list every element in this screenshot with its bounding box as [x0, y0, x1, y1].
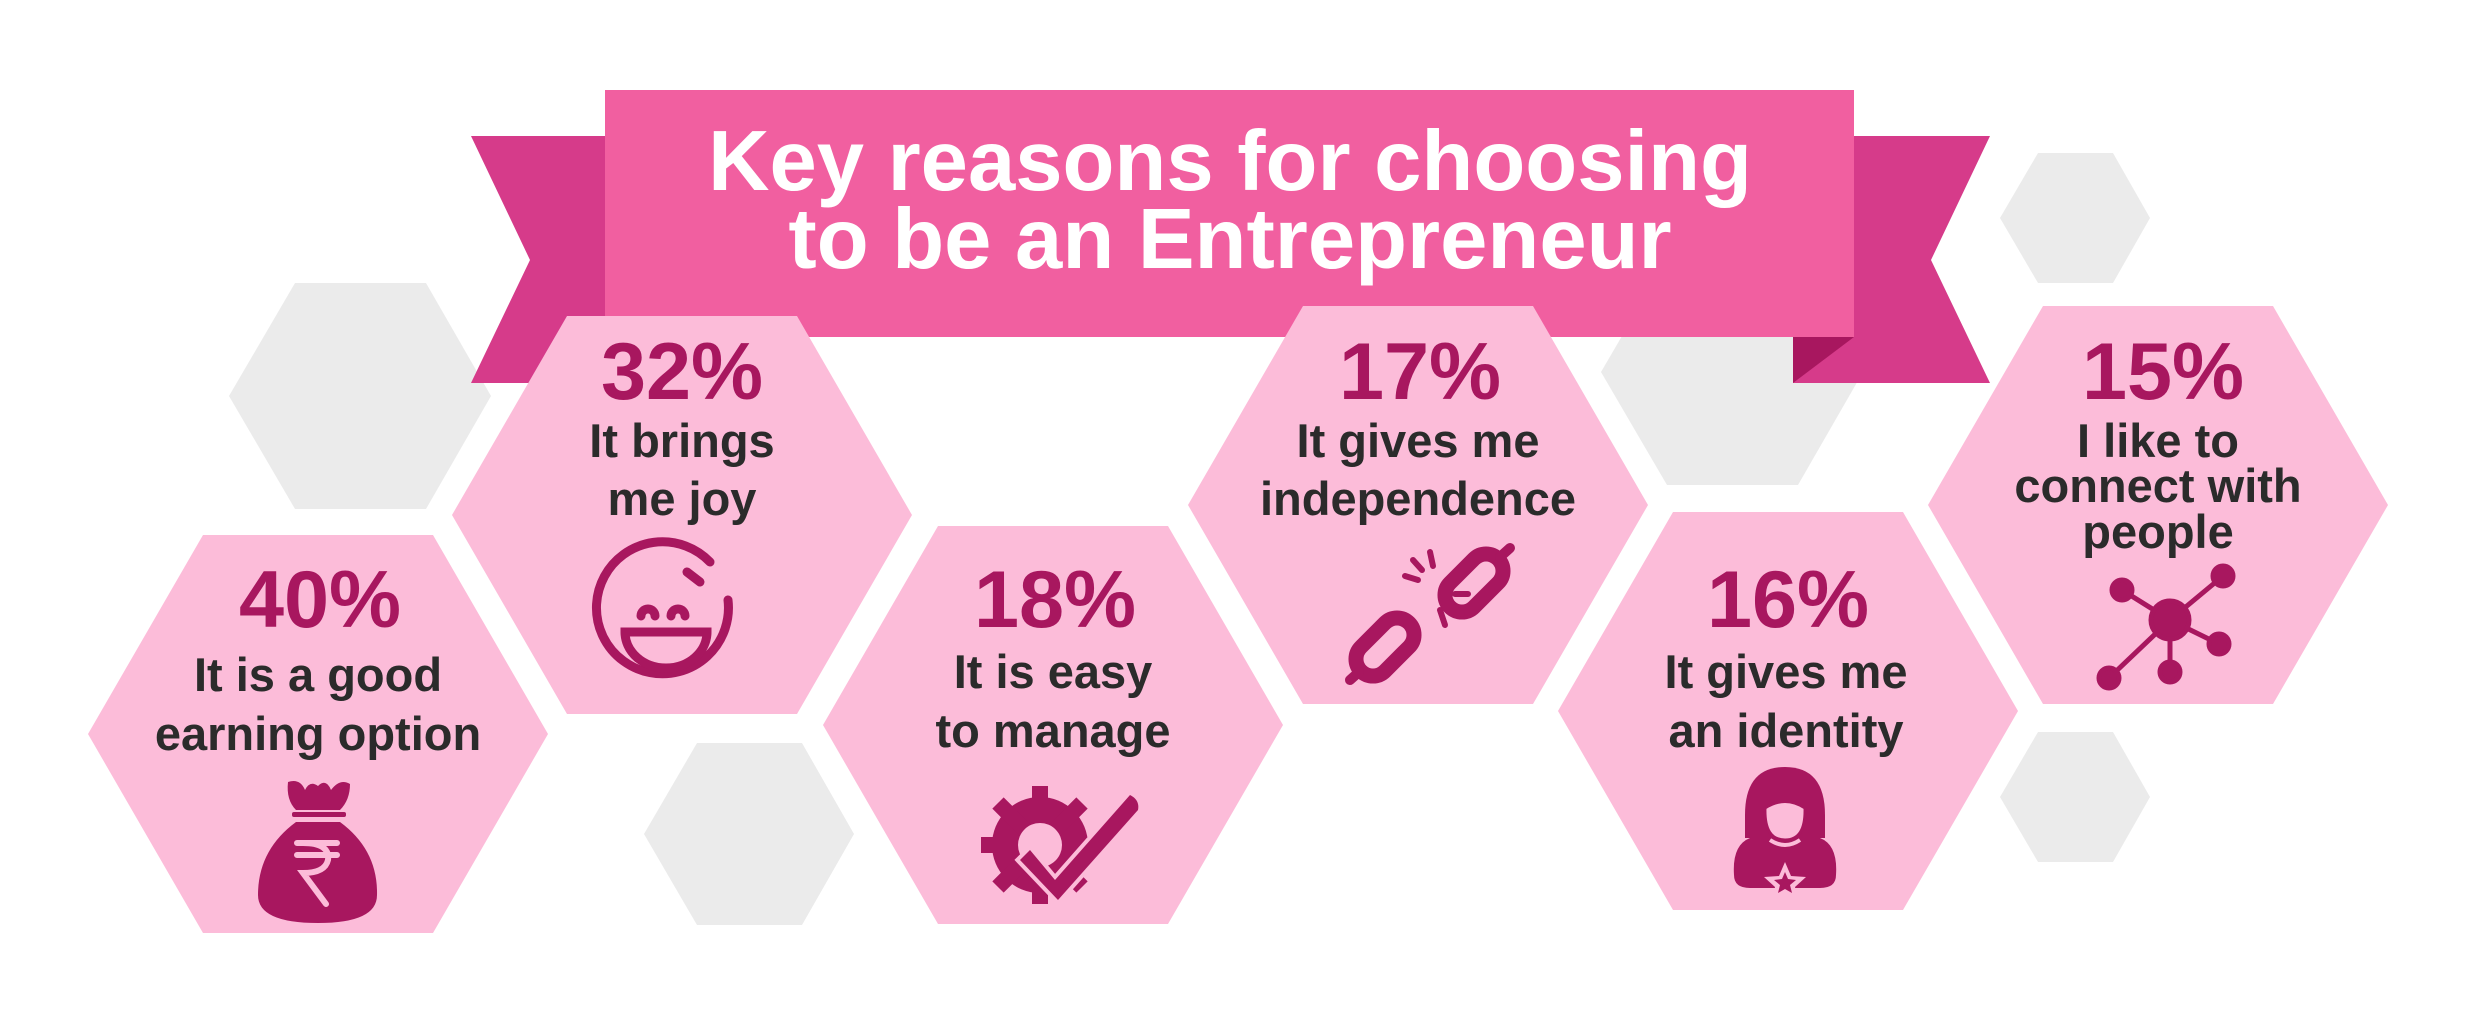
icon: money bag — [258, 781, 377, 923]
icon: person with star — [1734, 767, 1836, 902]
panel: 18% easy to manage — [823, 526, 1283, 924]
panel: 40% good earning option: It is a good — [194, 648, 442, 701]
panel: 16% identity: It gives me — [1665, 645, 1907, 698]
panel: 16% identity: an identity — [1668, 704, 1904, 757]
panel: 18% easy to manage: to manage — [935, 704, 1171, 757]
panel: 16% identity — [1558, 512, 2018, 910]
panel: 32% brings me joy: me joy — [608, 472, 756, 525]
panel: 40% good earning option — [88, 535, 548, 933]
panel: 16% identity: 16% — [1707, 555, 1869, 645]
panel: 15% connect with people — [1928, 306, 2388, 704]
panel: 32% brings me joy — [452, 316, 912, 714]
panel: 40% good earning option: earning option — [155, 707, 481, 760]
panel: 40% good earning option: 40% — [239, 555, 401, 645]
panel: 18% easy to manage: 18% — [974, 555, 1136, 645]
icon: broken chain — [1349, 547, 1510, 683]
icon: smiley — [596, 542, 728, 674]
panel: 15% connect with people: people — [2082, 505, 2234, 558]
title banner — [471, 90, 1990, 383]
title: Key reasons for choosing — [708, 114, 1752, 209]
icon: gear with check — [981, 786, 1138, 904]
panel: 17% independence — [1188, 306, 1648, 704]
panel: 17% independence: It gives me — [1297, 414, 1539, 467]
panel: 32% brings me joy: It brings — [589, 414, 775, 467]
background gray hexagons — [229, 153, 2150, 925]
panel: 15% connect with people: connect with — [2014, 459, 2302, 512]
icon: network — [2099, 566, 2233, 688]
panel: 32% brings me joy: 32% — [601, 327, 763, 417]
panel: 15% connect with people: 15% — [2082, 327, 2244, 417]
panel: 17% independence: independence — [1260, 472, 1576, 525]
panel: 17% independence: 17% — [1339, 327, 1501, 417]
panel: 18% easy to manage: It is easy — [954, 645, 1152, 698]
title banner: to be an Entrepreneur — [788, 192, 1672, 287]
panel: 15% connect with people: I like to — [2077, 414, 2239, 467]
